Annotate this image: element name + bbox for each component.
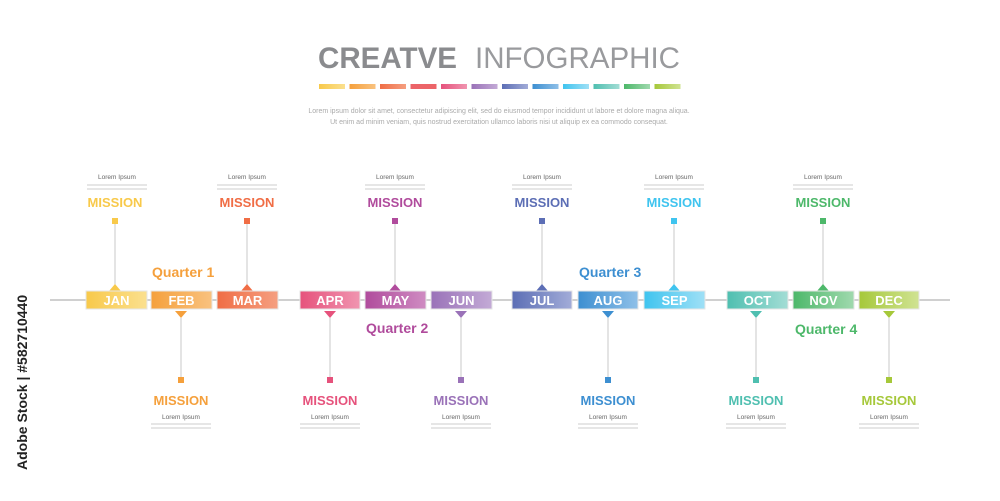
mission: AUG: Lorem Ipsum [589,414,627,421]
mission: FEB [151,311,211,428]
mission: JAN: Lorem Ipsum [98,174,136,181]
month: JUN: JUN [448,293,475,308]
month: JAN [86,291,147,309]
mission: NOV [793,174,853,291]
month boxes [86,291,919,309]
mission: MAR [217,174,277,291]
description text: Lorem ipsum dolor sit amet, consectetur adipiscing elit, sed do eiusmod tempor incididunt ut labore et dolore magna aliqua. [308,108,690,115]
mission: JUL [512,174,572,291]
month: DEC [859,291,919,309]
title: CREATVE [318,42,457,75]
mission: JUL: MISSION [515,195,569,210]
top missions [87,174,853,291]
mission: JAN [87,174,147,291]
mission: AUG [578,311,638,428]
mission: MAR: Lorem Ipsum [228,174,266,181]
month: NOV: NOV [809,293,838,308]
description text [308,108,690,126]
mission: DEC [859,311,919,428]
mission: DEC: Lorem Ipsum [870,414,908,421]
title: INFOGRAPHIC [475,42,680,75]
month: JAN: JAN [103,293,130,308]
month: FEB: FEB [168,293,194,308]
quarter 3: Quarter 3 [579,264,641,280]
mission: JAN: MISSION [88,195,142,210]
month: DEC: DEC [875,293,903,308]
month: AUG [578,291,638,309]
timeline line [50,299,950,301]
month: OCT [727,291,788,309]
month: FEB [151,291,212,309]
mission: OCT: MISSION [729,393,783,408]
month: MAR: MAR [233,293,263,308]
month: SEP [644,291,705,309]
month: MAY: MAY [382,293,410,308]
mission: NOV: Lorem Ipsum [804,174,842,181]
mission: JUN: MISSION [434,393,488,408]
mission: FEB: MISSION [154,393,208,408]
month: APR [300,291,360,309]
quarter labels [152,264,857,337]
mission: SEP: MISSION [647,195,701,210]
mission: DEC: MISSION [862,393,916,408]
month: JUL [512,291,572,309]
mission: JUN [431,311,491,428]
color swatches [319,84,680,89]
month: MAR [217,291,278,309]
description text: Ut enim ad minim veniam, quis nostrud exercitation ullamco laboris nisi ut aliquip ex ea commodo consequat. [330,119,668,126]
mission: SEP [644,174,704,291]
mission: MAY: MISSION [368,195,422,210]
mission: SEP: Lorem Ipsum [655,174,693,181]
mission: OCT [726,311,786,428]
mission: NOV: MISSION [796,195,850,210]
mission: APR: Lorem Ipsum [311,414,349,421]
mission: AUG: MISSION [581,393,635,408]
mission: JUN: Lorem Ipsum [442,414,480,421]
mission: MAR: MISSION [220,195,274,210]
quarter 4: Quarter 4 [795,321,857,337]
month: OCT: OCT [744,293,771,308]
month: NOV [793,291,854,309]
month: SEP: SEP [661,293,688,308]
month: JUN [431,291,492,309]
mission: MAY: Lorem Ipsum [376,174,414,181]
bottom missions [151,311,919,428]
mission: FEB: Lorem Ipsum [162,414,200,421]
mission: OCT: Lorem Ipsum [737,414,775,421]
mission: APR: MISSION [303,393,357,408]
quarter 1: Quarter 1 [152,264,214,280]
side credit: Adobe Stock | #582710440 [14,295,30,470]
mission: JUL: Lorem Ipsum [523,174,561,181]
quarter 2: Quarter 2 [366,320,428,336]
title [318,42,680,75]
month: JUL: JUL [530,293,554,308]
month: MAY [365,291,426,309]
mission: MAY [365,174,425,291]
month: AUG: AUG [594,293,622,308]
month: APR: APR [316,293,344,308]
mission: APR [300,311,360,428]
